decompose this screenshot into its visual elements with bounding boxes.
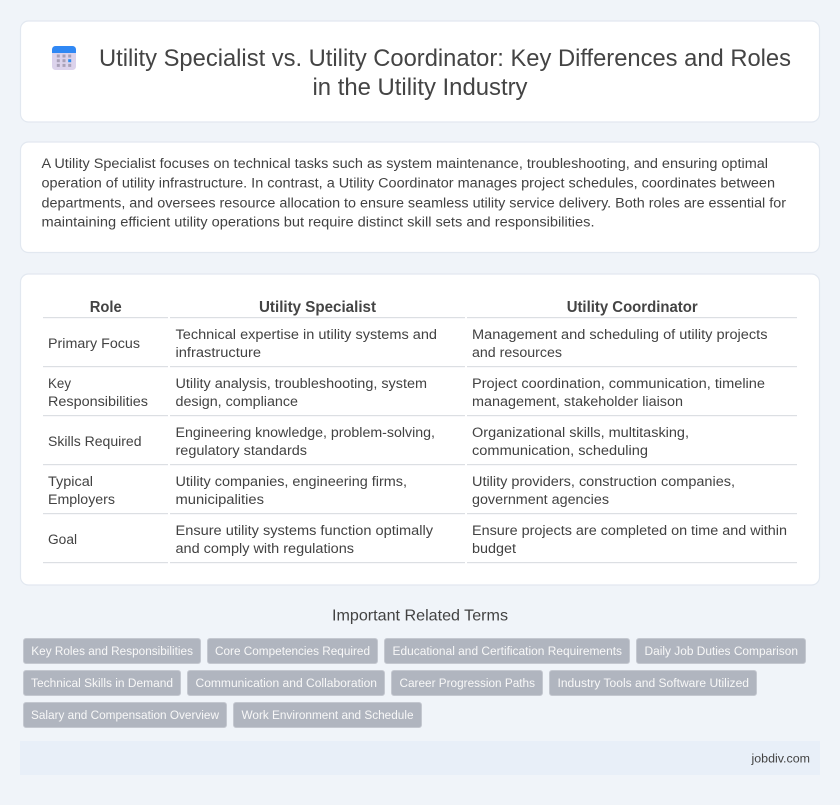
- table row: skills required: [43, 425, 797, 465]
- table row: key responsibilities: Responsibilities: [48, 394, 148, 410]
- text block: introduction paragraph: maintaining efficient utility operations but require distinct skill sets and responsibilities.: [42, 214, 594, 230]
- title: in the Utility Industry: [312, 74, 528, 101]
- table row: skills required: Organizational skills, multitasking,: [472, 425, 689, 441]
- tag: [24, 670, 180, 696]
- tag: [188, 670, 384, 696]
- table header row: [43, 299, 797, 318]
- tag: [550, 670, 756, 696]
- table row: key responsibilities: Project coordination, communication, timeline: [472, 376, 765, 392]
- footer: jobdiv.com: [750, 752, 810, 766]
- icon: calendar: [52, 46, 76, 70]
- table row: typical employers: Utility companies, engineering firms,: [176, 474, 407, 490]
- table row: typical employers: Employers: [48, 492, 115, 508]
- table row: primary focus: infrastructure: [176, 345, 261, 361]
- tag: Career Progression Paths: [400, 676, 535, 690]
- table header row: Role: [90, 299, 122, 316]
- tag: [24, 702, 226, 728]
- table header row: Utility Specialist: [259, 299, 376, 316]
- tag: [384, 638, 630, 664]
- text block: introduction paragraph: departments, and oversees resource allocation to ensure seamless utility service delivery. Both roles are essential for: [42, 195, 786, 211]
- table header row: Utility Coordinator: [567, 299, 698, 316]
- text block: introduction paragraph: [42, 156, 786, 230]
- table row: key responsibilities: Utility analysis, troubleshooting, system: [176, 376, 427, 392]
- tag: Educational and Certification Requirements: [392, 644, 622, 658]
- tag: [636, 638, 806, 664]
- table row: primary focus: Technical expertise in utility systems and: [176, 327, 437, 343]
- table row: primary focus: Primary Focus: [48, 336, 140, 352]
- table row: key responsibilities: [43, 376, 797, 416]
- table row: goal: Goal: [48, 532, 77, 548]
- table row: goal: and comply with regulations: [176, 541, 354, 557]
- panel: comparison table: [20, 274, 820, 585]
- panel: title header: [20, 21, 820, 122]
- tag: Key Roles and Responsibilities: [31, 644, 193, 658]
- title: Utility Specialist vs. Utility Coordinator: Key Differences and Roles: [99, 45, 791, 72]
- tag: Salary and Compensation Overview: [31, 708, 219, 722]
- tag: Work Environment and Schedule: [242, 708, 414, 722]
- footer: [20, 741, 820, 775]
- text block: introduction paragraph: A Utility Specialist focuses on technical tasks such as system maintenance, troubleshooting, and ensuring optimal: [42, 156, 768, 172]
- table row: key responsibilities: design, compliance: [176, 394, 298, 410]
- table row: primary focus: and resources: [472, 345, 562, 361]
- tag: Communication and Collaboration: [196, 676, 377, 690]
- table row: goal: budget: [472, 541, 516, 557]
- table row: skills required: regulatory standards: [176, 443, 307, 459]
- table row: goal: Ensure utility systems function optimally: [176, 523, 434, 539]
- tag: Core Competencies Required: [215, 644, 370, 658]
- tag: [208, 638, 378, 664]
- table row: typical employers: Typical: [48, 474, 93, 490]
- tag: [392, 670, 542, 696]
- heading: important related terms: Important Related Terms: [332, 608, 508, 624]
- table row: primary focus: Management and scheduling of utility projects: [472, 327, 768, 343]
- title: [99, 45, 791, 101]
- table row: key responsibilities: Key: [48, 376, 72, 392]
- table row: goal: Ensure projects are completed on time and within: [472, 523, 787, 539]
- table row: typical employers: municipalities: [176, 492, 264, 508]
- tag: Technical Skills in Demand: [31, 676, 173, 690]
- table row: skills required: Engineering knowledge, problem-solving,: [176, 425, 435, 441]
- tag: [234, 702, 422, 728]
- table row: typical employers: Utility providers, construction companies,: [472, 474, 735, 490]
- panel: introduction: [20, 142, 820, 252]
- tag group: related terms: [24, 638, 806, 728]
- table row: key responsibilities: management, stakeholder liaison: [472, 394, 683, 410]
- tag: Daily Job Duties Comparison: [644, 644, 798, 658]
- table row: typical employers: government agencies: [472, 492, 609, 508]
- table row: primary focus: [43, 327, 797, 367]
- table row: skills required: communication, scheduling: [472, 443, 648, 459]
- table row: goal: [43, 523, 797, 563]
- table row: skills required: Skills Required: [48, 434, 142, 450]
- tag: Industry Tools and Software Utilized: [558, 676, 749, 690]
- tag: [24, 638, 200, 664]
- table row: typical employers: [43, 474, 797, 514]
- text block: introduction paragraph: operation of utility infrastructure. In contrast, a Utility Coordinator manages project schedules, coordinates between: [42, 176, 775, 192]
